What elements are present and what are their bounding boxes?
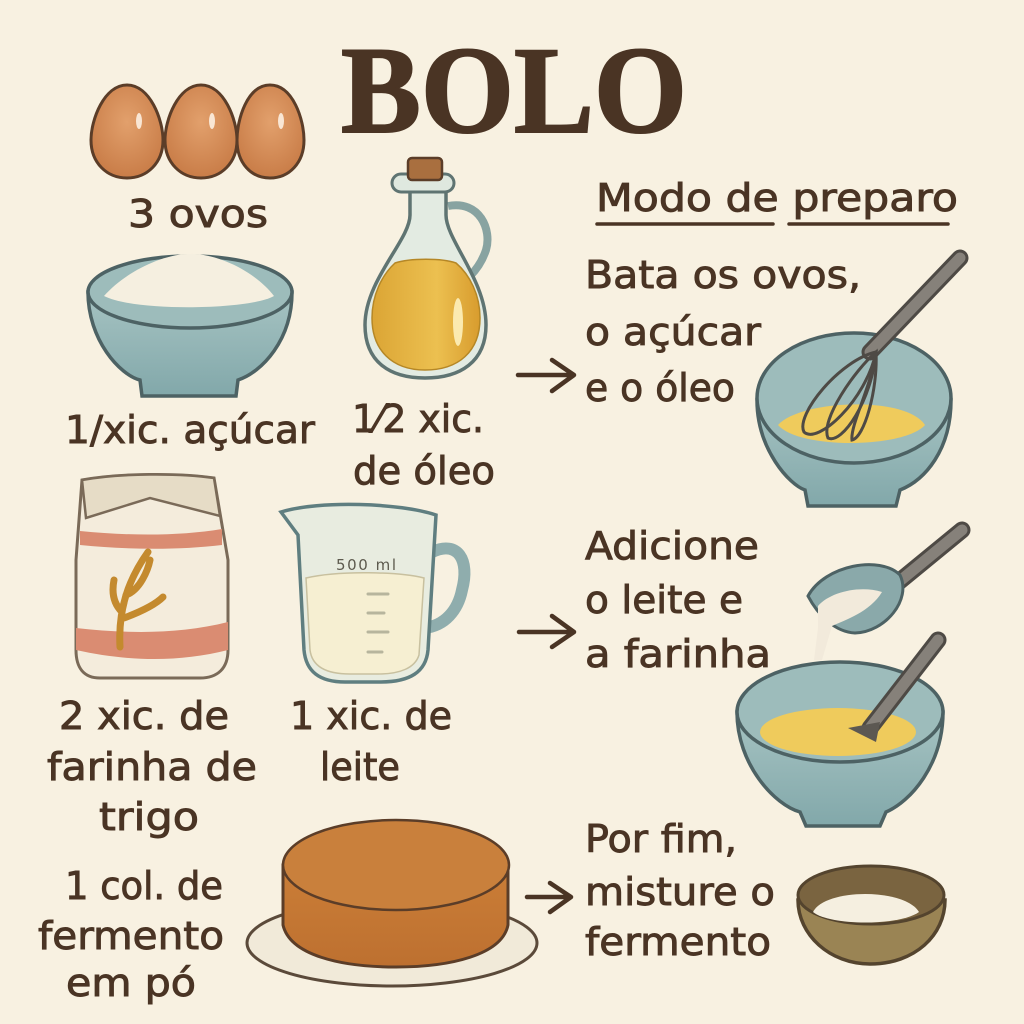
step 2 text: Adicione bbox=[585, 524, 759, 568]
label: baking powder: em pó bbox=[66, 961, 196, 1005]
step 1 text: o açúcar bbox=[585, 310, 761, 354]
label: oil: de óleo bbox=[353, 449, 495, 493]
icon: bowl with spoon bbox=[737, 640, 943, 826]
icon: sugar bowl bbox=[88, 254, 292, 396]
label: sugar: 1/xic. açúcar bbox=[65, 408, 315, 452]
arrow 3 bbox=[527, 883, 571, 912]
icon: small wooden bowl bbox=[798, 866, 945, 964]
icon: cake on plate bbox=[247, 820, 537, 986]
icon: measuring cup: 500 ml bbox=[336, 556, 396, 574]
label: baking powder bbox=[38, 864, 224, 1005]
icon: flour bag bbox=[76, 474, 228, 678]
label: baking powder: 1 col. de bbox=[65, 864, 223, 908]
label: flour: trigo bbox=[99, 795, 199, 839]
step 3 text: Por fim, bbox=[585, 817, 737, 861]
label: flour: farinha de bbox=[47, 745, 257, 789]
step 1 text bbox=[585, 253, 861, 410]
icon: spoon pouring flour bbox=[808, 530, 962, 660]
arrow 1 bbox=[518, 360, 574, 391]
title: BOLO bbox=[341, 22, 687, 159]
step 2 text bbox=[585, 524, 771, 676]
label: milk: leite bbox=[320, 745, 400, 789]
icon: three eggs bbox=[91, 85, 304, 178]
label: baking powder: fermento bbox=[38, 914, 224, 958]
icon: oil bottle bbox=[365, 158, 487, 378]
heading: modo de preparo: Modo de preparo bbox=[596, 176, 958, 220]
step 2 text: a farinha bbox=[585, 632, 771, 676]
icon: measuring cup bbox=[281, 504, 464, 682]
arrow 2 bbox=[519, 616, 574, 647]
step 2 text: o leite e bbox=[585, 578, 743, 622]
step 3 text: misture o bbox=[585, 870, 775, 914]
step 3 text bbox=[585, 817, 775, 964]
label: eggs: 3 ovos bbox=[128, 192, 268, 236]
label: milk: 1 xic. de bbox=[290, 694, 452, 738]
icon: bowl with whisk bbox=[757, 258, 960, 506]
step 3 text: fermento bbox=[585, 920, 771, 964]
label: oil bbox=[352, 397, 495, 493]
step 1 text: e o óleo bbox=[585, 366, 735, 410]
label: flour bbox=[47, 694, 257, 839]
step 1 text: Bata os ovos, bbox=[585, 253, 861, 297]
label: flour: 2 xic. de bbox=[59, 694, 229, 738]
label: milk bbox=[290, 694, 452, 789]
label: oil: 1⁄2 xic. bbox=[352, 397, 484, 441]
